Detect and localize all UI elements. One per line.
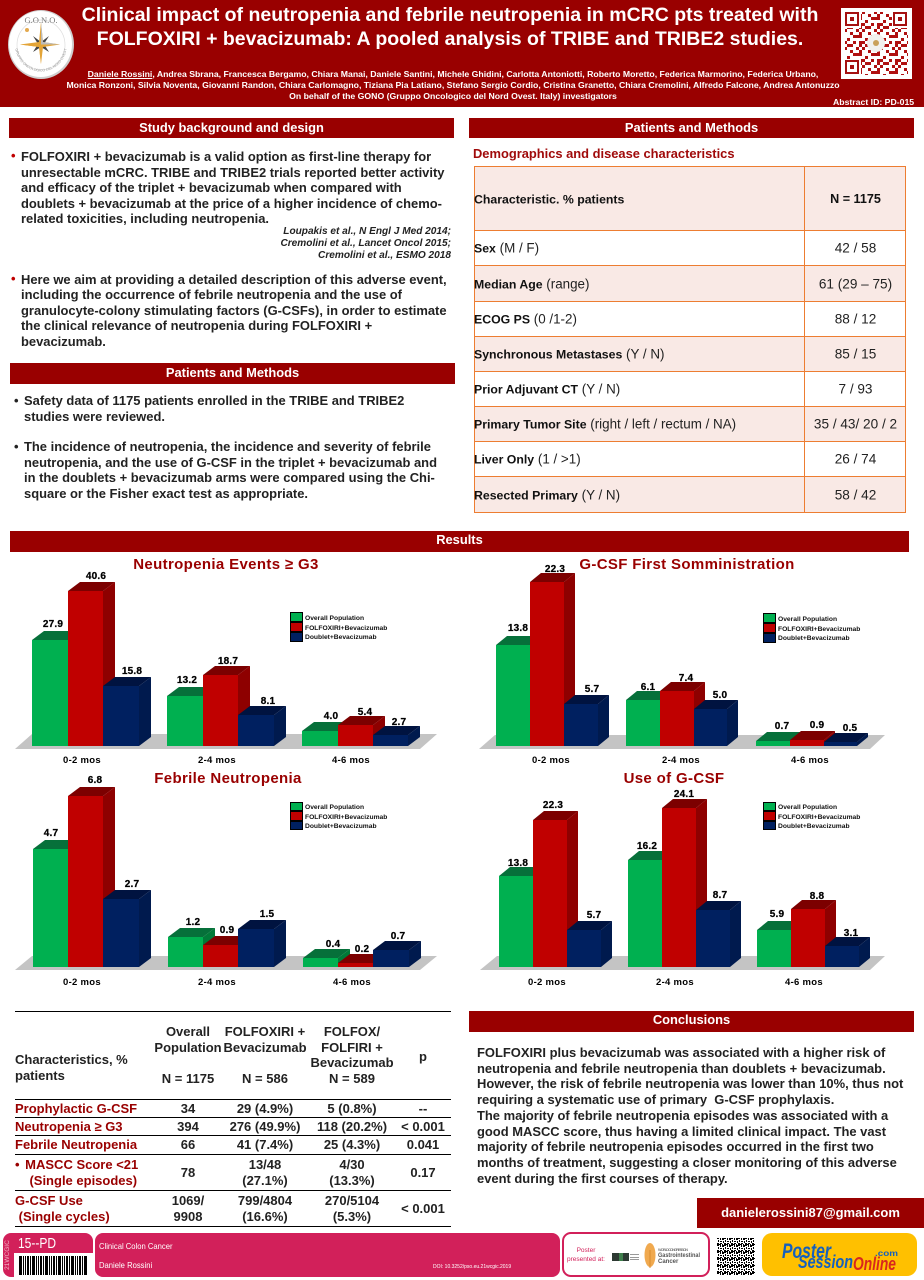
chart: g-csf first somministration: 22.3	[545, 564, 565, 575]
email: danielerossini87@gmail.com	[721, 1205, 900, 1220]
row: mascc: (Single episodes)	[29, 1173, 137, 1188]
chart: febrile neutropenia: 0.4	[326, 939, 340, 950]
table header: Bevacizumab	[310, 1055, 394, 1070]
bullet text 2: bevacizumab.	[21, 334, 106, 349]
chart: g-csf first somministration: 0-2 mos	[532, 755, 570, 766]
results heading: Results	[436, 532, 483, 547]
chart: use of g-csf: 2-4 mos	[656, 977, 694, 988]
chart: febrile neutropenia: 0.7	[391, 931, 405, 942]
panel: patients and methods left	[10, 363, 455, 500]
heading: Study background and design	[139, 120, 324, 135]
row: adjuvant: Prior Adjuvant CT (Y / N)	[474, 382, 620, 396]
row: neutropenia: Neutropenia ≥ G3	[15, 1119, 123, 1134]
row: febrile neutropenia: Febrile Neutropenia	[15, 1137, 137, 1152]
header row: Characteristic. % patients	[474, 192, 624, 206]
icon: esmo and congress logo: Cancer	[658, 1259, 679, 1265]
row: g-csf use: < 0.001	[401, 1201, 445, 1216]
chart: g-csf first somministration: 6.1	[641, 682, 655, 693]
row: g-csf use: 1069/	[172, 1193, 204, 1208]
bullet text 1: FOLFOXIRI + bevacizumab is a valid option as first-line therapy for	[21, 149, 431, 164]
row: sex: Sex (M / F)	[474, 240, 539, 256]
conclusions text: FOLFOXIRI plus bevacizumab was associated with a higher risk of	[477, 1045, 885, 1060]
bullet text 2: Here we aim at providing a detailed description of this adverse event,	[21, 272, 447, 286]
chart: neutropenia events: 13.2	[177, 675, 197, 686]
table header: Characteristics, %	[15, 1052, 128, 1067]
chart: g-csf first somministration: FOLFOXIRI+Bevacizumab	[778, 626, 860, 633]
table header	[15, 1024, 427, 1086]
row: adjuvant	[474, 371, 906, 407]
bullet text safety data: •	[14, 393, 19, 408]
chart: neutropenia events: Overall Population	[305, 615, 364, 622]
chart: neutropenia events: 40.6	[86, 571, 106, 582]
heading: Patients and Methods	[625, 120, 758, 135]
references: Cremolini et al., ESMO 2018	[318, 250, 451, 261]
conclusions text: good MASCC score, thus having a limited clinical impact. The vast	[477, 1124, 886, 1139]
presented label: presented at:	[567, 1256, 605, 1262]
conclusions text	[477, 1045, 904, 1186]
chart: use of g-csf: Doublet+Bevacizumab	[778, 823, 850, 830]
table header: Population	[154, 1040, 222, 1055]
conclusions text: event during the first courses of therapy.	[477, 1171, 728, 1186]
bullet text safety data	[14, 393, 404, 424]
row: prophylactic g-csf: --	[419, 1101, 427, 1116]
logo text	[782, 1240, 898, 1274]
references: Cremolini et al., Lancet Oncol 2015;	[280, 238, 451, 249]
row: ecog: 88 / 12	[835, 312, 876, 326]
chart: use of g-csf: 8.8	[810, 891, 824, 902]
barcode	[14, 1253, 93, 1277]
chart: use of g-csf: Use of G-CSF	[624, 770, 724, 787]
vertical conference label: 21WCGIC	[4, 1240, 11, 1270]
footer: id box	[3, 1233, 93, 1277]
bullet text incidence: •	[14, 439, 19, 454]
bullet text 1: unresectable mCRC. TRIBE and TRIBE2 trials reported better activity	[21, 165, 444, 180]
footer: session bar	[95, 1233, 560, 1277]
row: g-csf use: 9908	[174, 1209, 202, 1224]
session name: Clinical Colon Cancer	[99, 1241, 173, 1251]
icon: GONO logo	[8, 10, 74, 79]
row: tumor site	[474, 406, 906, 442]
table header: N = 589	[329, 1071, 375, 1086]
conclusions text: months of treatment, suggesting a closer monitoring of this adverse	[477, 1155, 897, 1170]
bullet text safety data: studies were reviewed.	[24, 408, 165, 424]
row: prophylactic g-csf: 34	[181, 1101, 195, 1116]
references: Loupakis et al., N Engl J Med 2014;	[283, 226, 451, 237]
abstract id: Abstract ID: PD-015	[833, 97, 914, 107]
heading	[10, 363, 455, 384]
chart: febrile neutropenia: Febrile Neutropenia	[154, 770, 302, 787]
row: age: Median Age (range)	[474, 276, 589, 291]
header row: N = 1175	[830, 192, 881, 206]
subheading: Demographics and disease characteristics	[473, 146, 735, 161]
row: ecog: ECOG PS (0 /1-2)	[474, 312, 577, 326]
title: FOLFOXIRI + bevacizumab: A pooled analysis of TRIBE and TRIBE2 studies.	[97, 28, 803, 50]
chart: neutropenia events: Doublet+Bevacizumab	[305, 634, 377, 641]
chart: use of g-csf: 4-6 mos	[785, 977, 823, 988]
row: mascc: 0.17	[410, 1165, 436, 1180]
row: sex	[474, 230, 906, 266]
icon: QR code	[841, 8, 912, 79]
chart: febrile neutropenia: 1.2	[186, 917, 200, 928]
chart: use of g-csf: 22.3	[543, 800, 563, 811]
row: mascc: 78	[181, 1165, 195, 1180]
authors: On behalf of the GONO (Gruppo Oncologico del Nord Ovest. Italy) investigators	[289, 91, 617, 101]
bullet text 2: •	[11, 270, 16, 286]
doi: DOI: 10.3252/pso.eu.21wcgic.2019	[433, 1264, 511, 1270]
row: g-csf use: 270/5104	[325, 1193, 379, 1208]
authors: Monica Ronzoni, Silvia Noventa, Giovanni Randon, Chiara Carlomagno, Tiziana Pia Latiano, Stefano Sergio Cordio, Cristina Granetto, Chiara Cremolini, Alfredo Falcone, Andrea Antonuzzo	[66, 80, 840, 90]
header row	[474, 166, 906, 231]
authors: Daniele Rossini, Andrea Sbrana, Francesca Bergamo, Chiara Manai, Daniele Santini, Michele Ghidini, Carlotta Antoniotti, Roberto Moretto, Federica Marmorino, Federica Urbano,	[88, 68, 818, 78]
row: mascc: (13.3%)	[329, 1173, 375, 1188]
row: synchronous: Synchronous Metastases (Y / N)	[474, 346, 664, 362]
chart: use of g-csf: Overall Population	[778, 804, 837, 811]
logo text: Poster	[782, 1240, 832, 1263]
footer: qr code	[717, 1238, 755, 1275]
chart: use of g-csf: 24.1	[674, 789, 694, 800]
bullet text incidence: The incidence of neutropenia, the incidence and severity of febrile	[24, 439, 431, 454]
chart: febrile neutropenia: Doublet+Bevacizumab	[305, 823, 377, 830]
chart: neutropenia events: 15.8	[122, 666, 142, 677]
presented label	[567, 1247, 605, 1262]
chart: use of g-csf: 13.8	[508, 858, 528, 869]
outcomes table	[15, 1011, 451, 1227]
bullet text 2: the clinical relevance of neutropenia during FOLFOXIRI +	[21, 318, 372, 333]
presenter: Daniele Rossini	[99, 1260, 152, 1270]
chart: g-csf first somministration: 7.4	[679, 673, 693, 684]
authors	[66, 68, 840, 101]
chart: g-csf first somministration: 0.5	[843, 723, 857, 734]
row: resected: 58 / 42	[835, 487, 876, 502]
icon: GONO logo: GRUPPO ONCOLOGICO DEL NORD OVEST	[16, 48, 66, 72]
row: neutropenia: 394	[177, 1119, 199, 1134]
table header: Bevacizumab	[223, 1040, 307, 1055]
conclusions text: requiring a systematic use of primary G-CSF prophylaxis.	[477, 1092, 834, 1107]
heading	[469, 118, 914, 138]
chart: g-csf first somministration: Overall Population	[778, 616, 837, 623]
chart: febrile neutropenia: 4.7	[44, 828, 58, 839]
row: age: 61 (29 – 75)	[819, 276, 892, 291]
logo text: Online	[853, 1254, 896, 1274]
bullet text 1	[11, 148, 444, 226]
chart: neutropenia events: 2-4 mos	[198, 755, 236, 766]
row: resected	[474, 476, 906, 513]
table header: p	[419, 1049, 427, 1064]
chart: febrile neutropenia: 2-4 mos	[198, 977, 236, 988]
chart: use of g-csf: FOLFOXIRI+Bevacizumab	[778, 814, 860, 821]
bullet text 2: granulocyte-colony stimulating factors (G-CSFs), in order to estimate	[21, 303, 447, 318]
row: prophylactic g-csf: 5 (0.8%)	[327, 1101, 377, 1116]
row: febrile neutropenia: 66	[181, 1137, 195, 1152]
icon: esmo and congress logo: WORLD CONGRESS ON	[658, 1247, 688, 1252]
bullet text 1: and efficacy of the triplet + bevacizumab when compared with	[21, 180, 402, 195]
table header: FOLFOXIRI +	[225, 1024, 305, 1039]
panel: conclusions	[469, 1011, 924, 1228]
footer: poster presented at	[562, 1232, 710, 1277]
chart: use of g-csf	[480, 770, 885, 988]
id text: 15--PD	[18, 1235, 56, 1252]
chart: febrile neutropenia: 1.5	[260, 909, 274, 920]
row: synchronous	[474, 336, 906, 372]
row: neutropenia: 276 (49.9%)	[230, 1119, 300, 1134]
chart: g-csf first somministration: 0.7	[775, 721, 789, 732]
row: mascc: 4/30	[339, 1157, 365, 1172]
chart: neutropenia events: FOLFOXIRI+Bevacizumab	[305, 625, 387, 632]
row: synchronous: 85 / 15	[835, 346, 876, 362]
chart: febrile neutropenia: 6.8	[88, 775, 102, 786]
chart: g-csf first somministration: Doublet+Bevacizumab	[778, 635, 850, 642]
chart: use of g-csf: 5.9	[770, 909, 784, 920]
row: febrile neutropenia	[15, 1137, 439, 1152]
chart: neutropenia events: 2.7	[392, 717, 406, 728]
row: tumor site: Primary Tumor Site (right / left / rectum / NA)	[474, 416, 736, 432]
bullet text 2	[11, 270, 447, 349]
chart: neutropenia events: 8.1	[261, 696, 275, 707]
chart: febrile neutropenia: FOLFOXIRI+Bevacizumab	[305, 814, 387, 821]
demographics table	[474, 166, 906, 513]
results heading	[10, 531, 909, 552]
panel: patients and methods right	[469, 118, 914, 161]
bullet text 2: including the occurrence of febrile neutropenia and the use of	[21, 287, 402, 302]
logo text: .com	[875, 1249, 898, 1258]
row: g-csf use: (5.3%)	[333, 1209, 371, 1224]
panel: study background and design	[9, 118, 454, 349]
chart: g-csf first somministration: G-CSF First Somministration	[579, 556, 795, 573]
bullet text incidence: neutropenia, and the use of G-CSF in the triplet + bevacizumab and	[24, 454, 437, 470]
bullet text incidence: in the doublets + bevacizumab arms were compared using the Chi-	[24, 470, 435, 485]
row: neutropenia	[15, 1119, 445, 1134]
icon: GONO logo: G.O.N.O.	[24, 15, 58, 25]
row: mascc: • MASCC Score <21	[15, 1157, 138, 1172]
header banner	[0, 0, 924, 107]
title	[82, 4, 818, 50]
chart: neutropenia events: 4-6 mos	[332, 755, 370, 766]
bullet text incidence: square or the Fisher exact test as appropriate.	[24, 486, 308, 500]
chart: neutropenia events: 18.7	[218, 656, 238, 667]
icon: esmo and congress logo: Gastrointestinal	[658, 1253, 700, 1259]
conclusions text: neutropenia and febrile neutropenia than doublets + bevacizumab.	[477, 1061, 886, 1076]
row: neutropenia: 118 (20.2%)	[317, 1119, 387, 1134]
conclusions text: However, the risk of febrile neutropenia was lower than 10%, thus not	[477, 1076, 903, 1091]
row: febrile neutropenia: 0.041	[407, 1137, 439, 1152]
footer: postersessiononline logo	[762, 1233, 917, 1276]
chart: use of g-csf: 16.2	[637, 841, 657, 852]
table header: N = 586	[242, 1071, 288, 1086]
bullet text incidence	[14, 439, 437, 500]
row: g-csf use: G-CSF Use	[15, 1193, 83, 1208]
row: g-csf use: (16.6%)	[242, 1209, 288, 1224]
row: prophylactic g-csf	[15, 1101, 427, 1116]
bullet text 1: •	[11, 148, 16, 163]
heading	[9, 118, 454, 138]
chart: g-csf first somministration	[479, 556, 885, 766]
heading	[469, 1011, 914, 1032]
row: mascc	[15, 1157, 436, 1188]
chart: febrile neutropenia: 0-2 mos	[63, 977, 101, 988]
row: prophylactic g-csf: 29 (4.9%)	[237, 1101, 293, 1116]
conclusions text: majority of febrile neutropenia episodes occurred in the first two	[477, 1139, 874, 1154]
chart: g-csf first somministration: 5.0	[713, 690, 727, 701]
title: Clinical impact of neutropenia and febrile neutropenia in mCRC pts treated with	[82, 4, 818, 26]
heading: Patients and Methods	[166, 365, 299, 380]
chart: g-csf first somministration: 0.9	[810, 720, 824, 731]
chart: febrile neutropenia: 2.7	[125, 879, 139, 890]
row: g-csf use: 799/4804	[238, 1193, 292, 1208]
row: sex: 42 / 58	[835, 240, 876, 256]
heading: Conclusions	[653, 1012, 730, 1027]
chart: febrile neutropenia: 4-6 mos	[333, 977, 371, 988]
chart: neutropenia events: Neutropenia Events ≥ G3	[133, 556, 319, 573]
row: liver: 26 / 74	[835, 452, 876, 466]
icon: esmo and congress logo	[612, 1243, 700, 1268]
chart: use of g-csf: 5.7	[587, 910, 601, 921]
chart: neutropenia events: 0-2 mos	[63, 755, 101, 766]
row: mascc: (27.1%)	[242, 1173, 288, 1188]
row: tumor site: 35 / 43/ 20 / 2	[814, 416, 897, 432]
row: g-csf use: (Single cycles)	[19, 1209, 110, 1224]
chart: febrile neutropenia: 0.9	[220, 925, 234, 936]
row: liver	[474, 441, 906, 477]
presented label: Poster	[577, 1247, 595, 1254]
bullet text 1: doublets + bevacizumab at the price of a higher incidence of chemo-	[21, 196, 442, 211]
references	[280, 226, 451, 261]
chart: neutropenia events: 5.4	[358, 707, 372, 718]
chart: use of g-csf: 8.7	[713, 890, 727, 901]
row: adjuvant: 7 / 93	[838, 382, 872, 396]
chart: febrile neutropenia: Overall Population	[305, 804, 364, 811]
email	[697, 1198, 924, 1228]
chart: g-csf first somministration: 5.7	[585, 684, 599, 695]
chart: g-csf first somministration: 2-4 mos	[662, 755, 700, 766]
row: prophylactic g-csf: Prophylactic G-CSF	[15, 1101, 137, 1116]
row: febrile neutropenia: 25 (4.3%)	[324, 1137, 380, 1152]
bullet text safety data: Safety data of 1175 patients enrolled in the TRIBE and TRIBE2	[24, 393, 404, 408]
chart: neutropenia events: 4.0	[324, 711, 338, 722]
row: ecog	[474, 301, 906, 337]
table header: patients	[15, 1068, 65, 1083]
chart: febrile neutropenia	[15, 770, 437, 988]
chart: neutropenia events	[15, 556, 437, 766]
row: neutropenia: < 0.001	[401, 1119, 445, 1134]
table header: N = 1175	[162, 1071, 214, 1086]
table header: Overall	[166, 1024, 210, 1039]
chart: use of g-csf: 0-2 mos	[528, 977, 566, 988]
chart: g-csf first somministration: 4-6 mos	[791, 755, 829, 766]
table header: FOLFOX/	[324, 1024, 380, 1039]
conclusions text: The majority of febrile neutropenia episodes was associated with a	[477, 1108, 888, 1123]
chart: g-csf first somministration: 13.8	[508, 623, 528, 634]
row: g-csf use	[15, 1193, 445, 1224]
table header: FOLFIRI +	[321, 1040, 383, 1055]
chart: use of g-csf: 3.1	[844, 928, 858, 939]
row: age	[474, 265, 906, 302]
row: febrile neutropenia: 41 (7.4%)	[237, 1137, 293, 1152]
logo text: Session	[798, 1252, 853, 1272]
row: mascc: 13/48	[249, 1157, 281, 1172]
row: resected: Resected Primary (Y / N)	[474, 487, 620, 502]
chart: neutropenia events: 27.9	[43, 619, 63, 630]
chart: febrile neutropenia: 0.2	[355, 944, 369, 955]
row: liver: Liver Only (1 / >1)	[474, 452, 581, 466]
bullet text 1: related toxicities, including neutropenia.	[21, 211, 269, 226]
